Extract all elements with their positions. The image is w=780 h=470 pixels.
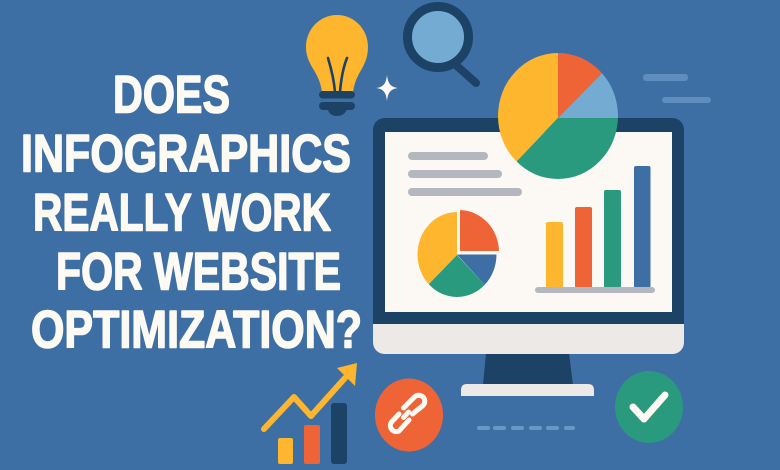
small pie chart <box>418 210 499 297</box>
title <box>21 66 362 360</box>
title: INFOGRAPHICS <box>21 124 351 184</box>
monitor stand <box>483 353 573 385</box>
icon: sparkle <box>376 75 398 101</box>
monitor frame <box>373 118 684 324</box>
text placeholder lines <box>408 152 522 196</box>
title: FOR WEBSITE <box>56 242 341 302</box>
bar chart <box>535 166 655 293</box>
large pie chart <box>498 53 618 179</box>
monitor screen <box>385 132 672 312</box>
icon: growth chart with arrow <box>264 363 357 464</box>
decorative lines top right <box>643 74 711 103</box>
icon: light bulb <box>306 15 368 116</box>
icon: link badge <box>375 378 443 452</box>
icon: check badge <box>615 371 683 443</box>
monitor <box>373 118 684 396</box>
dashed line below monitor <box>477 426 575 430</box>
title: OPTIMIZATION? <box>31 300 362 360</box>
monitor base <box>461 384 594 396</box>
icon: magnifying glass <box>408 6 476 83</box>
title: REALLY WORK <box>33 184 331 242</box>
title: DOES <box>113 66 230 124</box>
monitor chin <box>373 324 684 354</box>
